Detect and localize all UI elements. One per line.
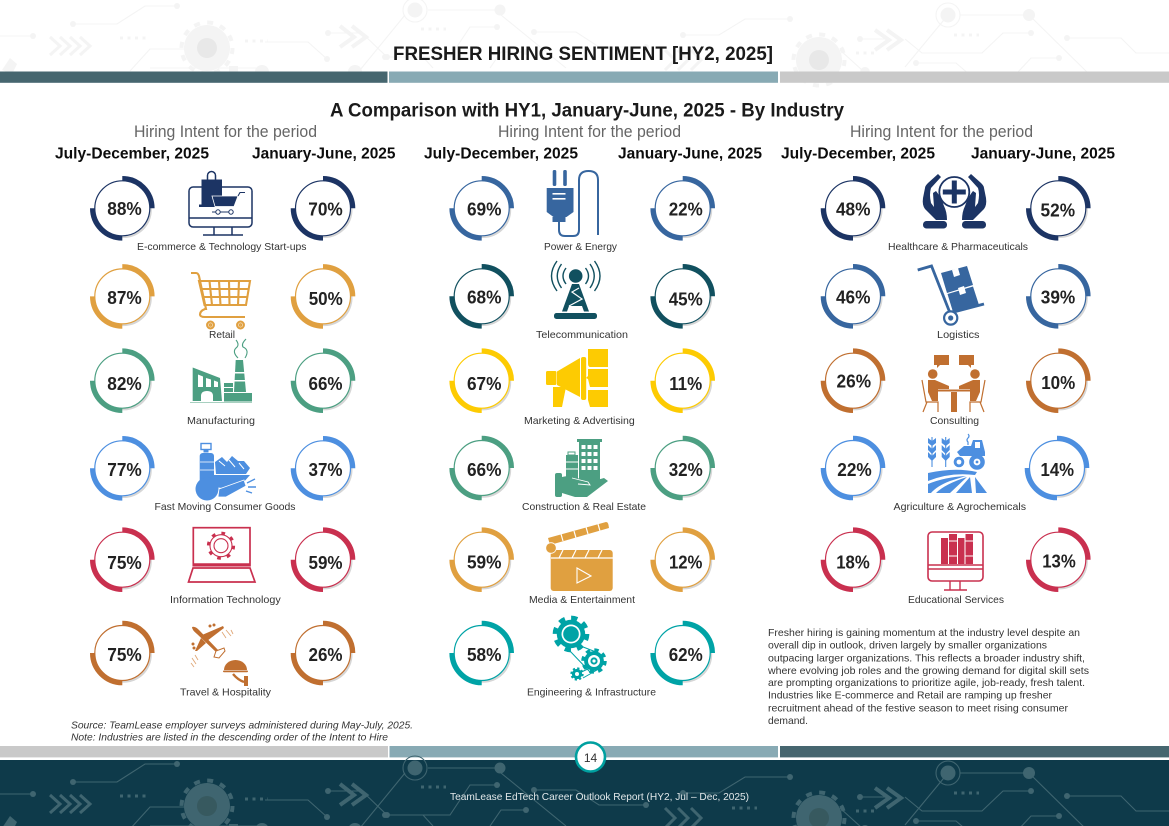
gauge 68%: [452, 266, 512, 326]
commentary paragraph: demand.: [768, 716, 808, 727]
icon: wheat, tractor and field: [928, 434, 987, 493]
gauge 45%: [653, 266, 713, 326]
gauge 67%: 67%: [467, 373, 502, 394]
commentary paragraph: Fresher hiring is gaining momentum at the industry level despite an: [768, 628, 1080, 639]
label: Consulting: [930, 416, 979, 427]
gauge 69%: 69%: [467, 199, 502, 220]
label: E-commerce & Technology Start-ups: [137, 242, 306, 253]
gauge 66%: [452, 438, 512, 498]
page number badge: 14: [584, 751, 597, 765]
icon: two people at table: [922, 355, 985, 412]
header band with circuit pattern: [0, 0, 1169, 86]
row: Media & Entertainment: [452, 522, 713, 606]
gauge 82%: [92, 351, 152, 411]
row: Healthcare & Pharmaceuticals: [823, 174, 1088, 253]
gauge 22%: [653, 178, 713, 238]
column headings: July-December, 2025: [424, 146, 578, 162]
icon: hand holding building: [555, 439, 608, 497]
gauge 26%: [823, 351, 883, 411]
column headings: January-June, 2025: [252, 146, 396, 162]
icon: interlocking gears: [555, 618, 605, 680]
commentary paragraph: overall dip in outlook, driven largely by smaller organizations: [768, 641, 1047, 652]
row: Agriculture & Agrochemicals: [823, 434, 1087, 513]
label: Retail: [209, 330, 235, 341]
gauge 39%: 39%: [1041, 286, 1076, 308]
gauge 59%: 59%: [467, 552, 502, 573]
commentary paragraph: recruitment ahead of the festive season to meet rising consumer: [768, 704, 1069, 715]
icon: groceries: [196, 444, 256, 500]
row: Travel & Hospitality: [92, 623, 353, 699]
gauge 87%: [92, 266, 152, 326]
gauge 13%: [1028, 530, 1088, 590]
row: Educational Services: [823, 530, 1088, 606]
gauge 10%: 10%: [1041, 372, 1075, 393]
label: Telecommunication: [536, 330, 628, 341]
gauge 75%: [92, 530, 152, 590]
gauge 77%: 77%: [107, 459, 142, 480]
gauge 32%: [653, 438, 713, 498]
gauge 18%: [823, 530, 883, 590]
gauge 75%: 75%: [107, 644, 142, 665]
row: Consulting: [823, 351, 1088, 427]
gauge 12%: [653, 530, 713, 590]
label: Media & Entertainment: [529, 595, 635, 606]
gauge 50%: 50%: [309, 288, 343, 309]
page number badge: [576, 742, 605, 772]
label: Agriculture & Agrochemicals: [894, 502, 1026, 513]
gauge 37%: [293, 438, 353, 498]
gauge 48%: 48%: [836, 199, 871, 220]
gauge 87%: 87%: [107, 287, 142, 308]
gauge 69%: [452, 178, 512, 238]
icon: laptop with gear: [188, 528, 255, 582]
row: Manufacturing: [92, 339, 353, 427]
bottom tricolour bar: [0, 746, 1169, 757]
gauge 46%: 46%: [836, 286, 871, 308]
gauge 68%: 68%: [467, 286, 502, 308]
row: Logistics: [823, 266, 1088, 341]
gauge 11%: [653, 351, 713, 411]
row: Information Technology: [92, 528, 353, 606]
icon: film clapperboard: [546, 522, 613, 591]
gauge 22%: [823, 438, 883, 498]
gauge 52%: 52%: [1041, 200, 1075, 221]
label: Information Technology: [170, 595, 282, 606]
gauge 70%: 70%: [308, 199, 343, 220]
gauge 59%: 59%: [308, 552, 343, 573]
gauge 75%: 75%: [107, 552, 142, 573]
footer text: TeamLease EdTech Career Outlook Report (HY2, Jul – Dec, 2025): [450, 792, 749, 803]
gauge 14%: 14%: [1041, 459, 1074, 480]
gauge 75%: [92, 623, 152, 683]
column headings: July-December, 2025: [55, 146, 209, 162]
gauge 39%: [1028, 266, 1088, 326]
commentary paragraph: [767, 628, 1089, 727]
gauge 26%: 26%: [308, 644, 343, 665]
icon: monitor with books: [928, 532, 983, 590]
source note: [71, 720, 413, 744]
gauge 26%: 26%: [837, 370, 871, 392]
column headings: January-June, 2025: [618, 146, 762, 162]
gauge 58%: [452, 623, 512, 683]
gauge 32%: 32%: [669, 459, 703, 480]
icon: hand truck with boxes: [918, 266, 984, 325]
row: Marketing & Advertising: [452, 349, 713, 427]
row: Engineering & Infrastructure: [452, 618, 713, 699]
column headings: Hiring Intent for the period: [850, 123, 1033, 141]
gauge 48%: [823, 178, 883, 238]
icon: megaphone with panels: [546, 349, 608, 407]
gauge 10%: [1028, 351, 1088, 411]
gauge 82%: 82%: [107, 373, 142, 394]
title: FRESHER HIRING SENTIMENT [HY2, 2025]: [393, 43, 773, 65]
gauge 59%: [452, 530, 512, 590]
gauge 66%: 66%: [308, 373, 343, 394]
footer band with circuit pattern: [0, 756, 1169, 826]
gauge 58%: 58%: [467, 644, 502, 665]
column headings: July-December, 2025: [781, 146, 935, 162]
commentary paragraph: outpacing larger organizations. This reflects a broader industry shift,: [768, 653, 1085, 664]
gauge 26%: [293, 623, 353, 683]
row: Power & Energy: [452, 170, 713, 253]
label: Healthcare & Pharmaceuticals: [888, 242, 1028, 253]
commentary paragraph: where evolving job roles and the growing demand for digital skill sets: [767, 666, 1089, 677]
top tricolour bar: [0, 72, 1169, 83]
gauge 22%: 22%: [837, 459, 872, 480]
commentary paragraph: are prompting organizations to prioritize agile, job-ready, fresh talent.: [768, 678, 1085, 689]
gauge 22%: 22%: [669, 199, 703, 220]
gauge 88%: [92, 178, 152, 238]
gauge 70%: [293, 178, 353, 238]
gauge 12%: 12%: [669, 552, 703, 573]
source note: Note: Industries are listed in the descending order of the Intent to Hire: [71, 733, 388, 744]
icon: monitor with shopping bag and cart: [189, 172, 252, 235]
column headings: [55, 123, 1115, 162]
label: Power & Energy: [544, 242, 618, 253]
gauge 59%: [293, 530, 353, 590]
label: Fast Moving Consumer Goods: [154, 502, 296, 513]
column headings: Hiring Intent for the period: [134, 123, 317, 141]
row: Retail: [92, 266, 353, 341]
row: E-commerce & Technology Start-ups: [92, 172, 353, 253]
column headings: January-June, 2025: [971, 146, 1115, 162]
label: Engineering & Infrastructure: [527, 688, 656, 699]
icon: factory: [190, 339, 252, 403]
icon: power plug: [547, 170, 598, 236]
gauge 45%: 45%: [669, 289, 703, 310]
gauge 66%: 66%: [467, 459, 502, 480]
gauge 18%: 18%: [836, 552, 870, 573]
icon: hands protecting medical cross: [923, 174, 986, 228]
gauge 13%: 13%: [1042, 550, 1076, 571]
row: Telecommunication: [452, 261, 713, 341]
icon: airplane and cloche: [191, 624, 248, 686]
label: Construction & Real Estate: [522, 502, 646, 513]
row: Fast Moving Consumer Goods: [92, 438, 353, 513]
gauge 46%: [823, 266, 883, 326]
gauge 62%: [653, 623, 713, 683]
row: Construction & Real Estate: [452, 438, 713, 513]
gauge 50%: [293, 266, 353, 326]
gauge 62%: 62%: [669, 644, 703, 665]
gauge 14%: [1027, 438, 1087, 498]
gauge 67%: [452, 351, 512, 411]
label: Educational Services: [908, 595, 1004, 606]
icon: signal tower: [552, 261, 600, 319]
gauge 37%: 37%: [308, 459, 343, 480]
gauge 77%: [92, 438, 152, 498]
label: Logistics: [937, 330, 980, 341]
source note: Source: TeamLease employer surveys administered during May-July, 2025.: [71, 720, 413, 731]
gauge 52%: [1028, 178, 1088, 238]
subtitle: A Comparison with HY1, January-June, 2025 - By Industry: [330, 100, 844, 122]
gauge 11%: 11%: [669, 373, 702, 394]
label: Travel & Hospitality: [180, 688, 272, 699]
icon: shopping cart: [191, 273, 250, 328]
gauge 66%: [293, 351, 353, 411]
label: Manufacturing: [187, 416, 255, 427]
column headings: Hiring Intent for the period: [498, 123, 681, 141]
gauge 88%: 88%: [107, 198, 142, 219]
commentary paragraph: Industries like E-commerce and Retail are ramping up fresher: [768, 691, 1053, 702]
label: Marketing & Advertising: [524, 416, 635, 427]
